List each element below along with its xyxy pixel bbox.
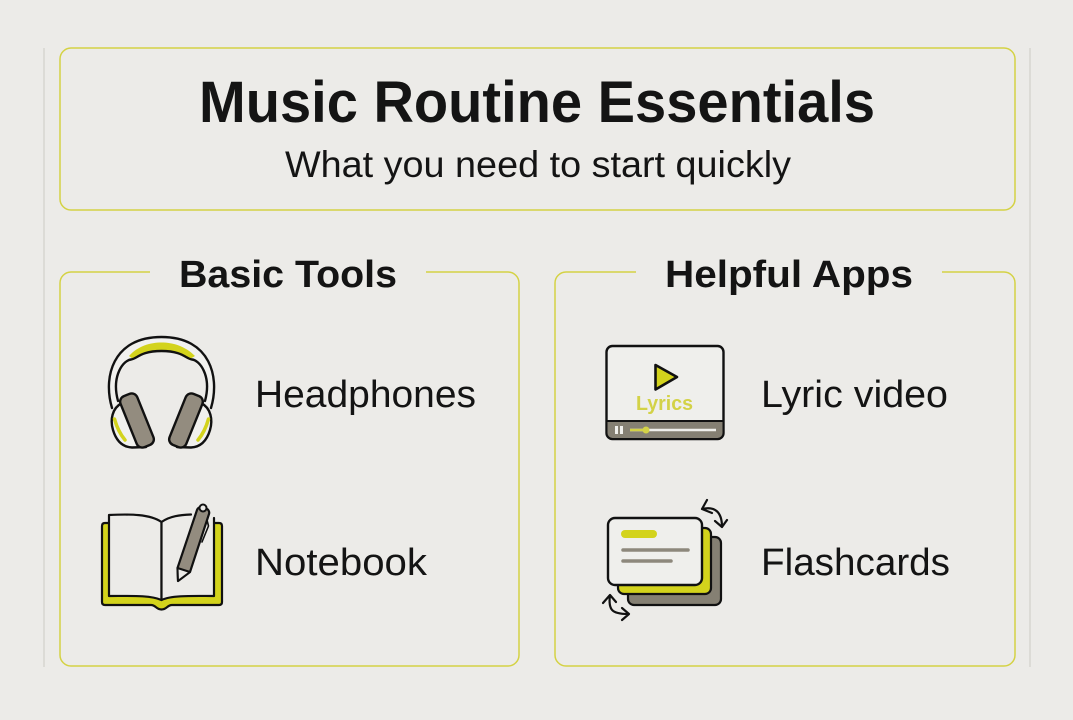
panel: header (60, 48, 1015, 210)
heading: helpful apps: Helpful Apps (665, 254, 913, 296)
label: notebook: Notebook (255, 542, 428, 584)
title: Music Routine Essentials (199, 70, 875, 135)
label: lyric video: Lyric video (761, 374, 948, 416)
icon: lyric video (606, 346, 724, 439)
label: flashcards: Flashcards (761, 542, 950, 584)
panel: basic tools (60, 254, 519, 666)
icon: lyric video: Lyrics (636, 393, 693, 415)
heading: basic tools: Basic Tools (179, 254, 397, 296)
icon: headphones (109, 337, 214, 449)
panel: helpful apps (555, 254, 1015, 666)
icon: notebook (102, 504, 222, 610)
icon: flashcards (603, 500, 727, 620)
subtitle: What you need to start quickly (285, 144, 792, 185)
label: headphones: Headphones (255, 374, 476, 416)
